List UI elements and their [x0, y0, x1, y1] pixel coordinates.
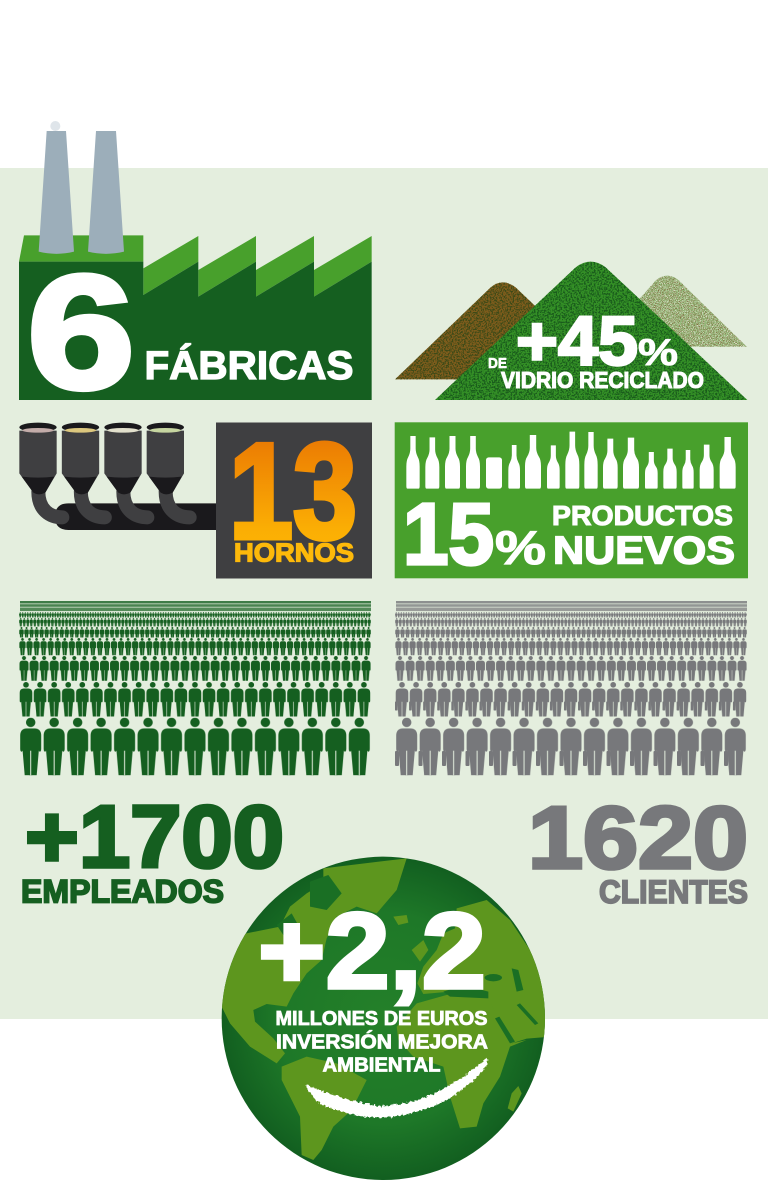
stat: +45%: +45 — [516, 302, 638, 380]
label: fábricas: FÁBRICAS — [144, 343, 354, 388]
label: hornos: HORNOS — [234, 538, 354, 568]
label: vidrio reciclado: VIDRIO RECICLADO — [501, 367, 704, 393]
icon: bottles — [406, 432, 736, 489]
icon: smile stroke — [306, 1058, 487, 1118]
label: empleados: EMPLEADOS — [21, 874, 224, 910]
stat: +1700 empleados — [21, 787, 284, 910]
crowd: employees — [19, 600, 372, 776]
label: inversión mejora: INVERSIÓN MEJORA — [276, 1029, 488, 1053]
panel: furnaces — [19, 415, 372, 578]
panel: new products — [395, 422, 748, 583]
label: clientes: CLIENTES — [599, 874, 748, 910]
number: 13: 13 — [229, 415, 357, 567]
box background — [395, 422, 748, 578]
label: millones de euros: MILLONES DE EUROS — [276, 1008, 488, 1030]
crowd: clients — [395, 600, 748, 776]
label: nuevos: NUEVOS — [553, 530, 735, 572]
stat: 1620 clientes — [528, 788, 748, 910]
number: 6: 6 — [27, 242, 135, 423]
label: productos: PRODUCTOS — [552, 500, 733, 531]
stat: 15: 15 — [403, 486, 494, 583]
number: +1700: +1700 — [25, 787, 284, 886]
label: ambiental: AMBIENTAL — [322, 1055, 440, 1077]
panel: recycled glass — [395, 262, 747, 400]
number: +2,2: +2,2 — [258, 890, 486, 1011]
icon: furnaces and pipe — [19, 423, 217, 530]
percent sign: % — [495, 521, 546, 574]
icon: glass piles — [395, 262, 747, 400]
panel: globe — [217, 857, 550, 1180]
icon: earth — [217, 857, 550, 1180]
icon: factory building — [19, 121, 372, 400]
background band — [0, 168, 768, 1019]
box: hornos — [216, 422, 372, 578]
percent sign: % — [638, 332, 678, 373]
briefcases: clients — [395, 682, 747, 766]
number: 1620: 1620 — [528, 788, 748, 887]
panel: factory — [19, 121, 372, 423]
label: de: DE — [488, 355, 507, 372]
